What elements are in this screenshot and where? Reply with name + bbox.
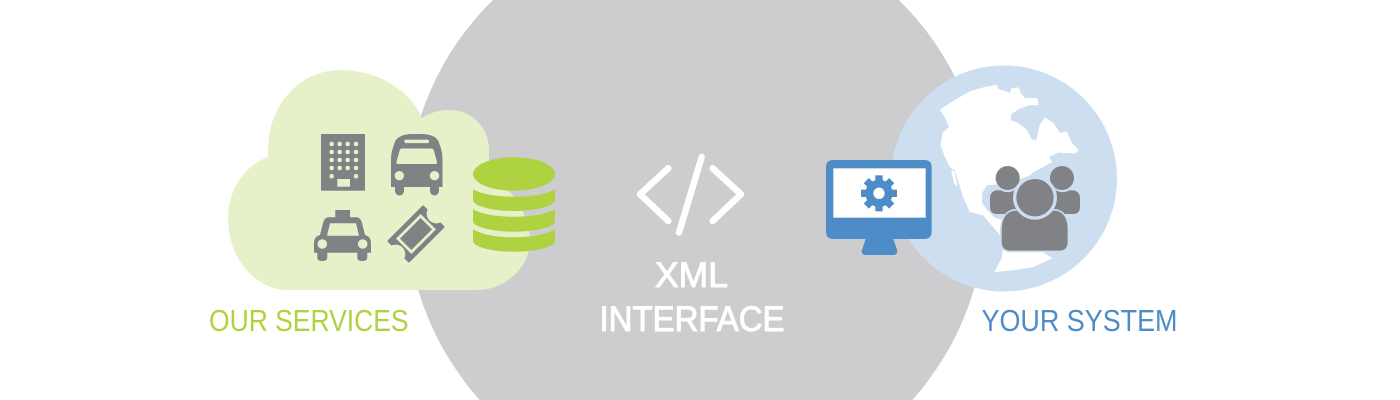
icon: bus: [391, 134, 442, 196]
heading: xml interface: [600, 256, 784, 339]
icon: ticket: [387, 205, 445, 263]
continents: [940, 85, 1078, 272]
grey central circle: [406, 0, 986, 400]
icon: building: [321, 134, 365, 191]
globe: [891, 66, 1117, 292]
icon: monitor with gear: [826, 160, 932, 255]
icon: people: [990, 166, 1080, 251]
heading: xml interface: XML: [655, 256, 728, 295]
icon: database: [473, 157, 555, 252]
label: your system: YOUR SYSTEM: [982, 304, 1178, 338]
heading: xml interface: INTERFACE: [600, 300, 784, 339]
icon: gear: [861, 175, 897, 211]
cloud shape: [228, 70, 530, 290]
icon: taxi: [314, 210, 371, 261]
icon: code brackets: [640, 157, 741, 232]
label: our services: OUR SERVICES: [209, 304, 408, 338]
